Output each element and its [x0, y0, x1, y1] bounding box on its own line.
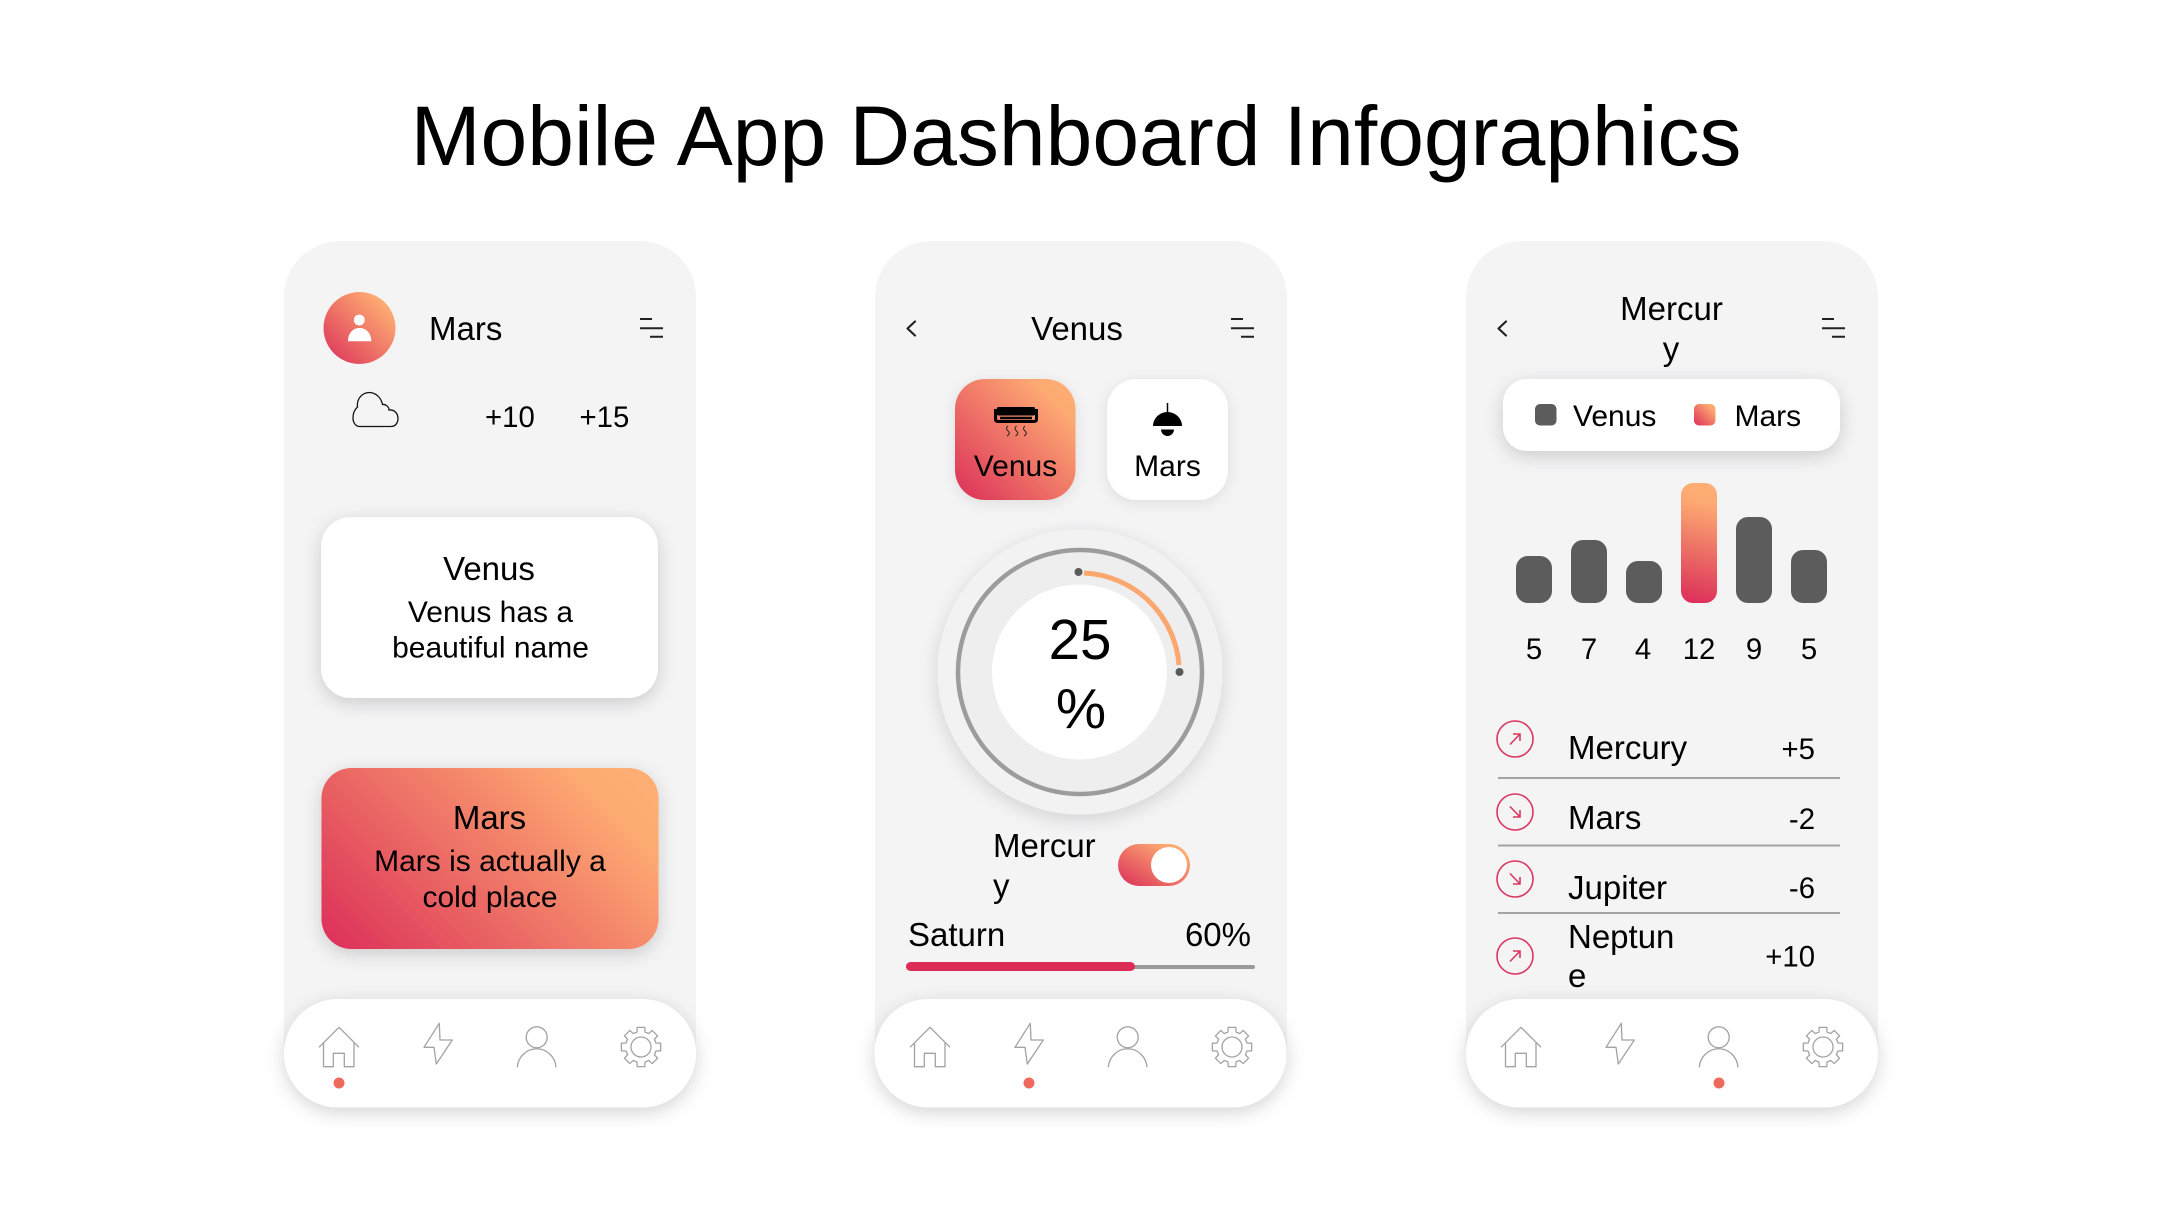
icon: menu — [1822, 319, 1845, 337]
icon: ceiling lamp — [1153, 403, 1182, 436]
screen heading: Mercur — [1620, 290, 1723, 327]
panel: Mercury statistics screen — [1466, 241, 1878, 1108]
list row: Neptune: +10 — [1765, 940, 1815, 974]
card: Mars — [322, 768, 658, 949]
icon: air conditioner — [996, 407, 1036, 436]
title: Mobile App Dashboard Infographics — [411, 89, 1741, 183]
icon: cloud — [353, 392, 398, 426]
temperature high: +15 — [580, 401, 629, 434]
progress bar — [906, 962, 1255, 971]
screen heading — [1620, 290, 1723, 367]
list row: Mars: Mars — [1568, 799, 1641, 836]
icon: settings — [1803, 1027, 1843, 1067]
icon: user — [1699, 1027, 1738, 1067]
bar chart: 5 — [1526, 633, 1542, 666]
gauge: % — [1056, 677, 1106, 740]
icon: lightning — [424, 1023, 452, 1064]
bar chart — [1516, 483, 1827, 666]
screen heading: y — [1663, 330, 1680, 367]
card: Venus: Venus — [443, 550, 535, 587]
user name: Mars — [429, 310, 502, 347]
legend: Mars — [1734, 400, 1801, 433]
icon: user — [1108, 1027, 1147, 1067]
list row: Jupiter — [1497, 861, 1840, 913]
legend: Venus — [1573, 400, 1656, 433]
tile: Venus: Venus — [974, 450, 1057, 483]
bar chart: 12 — [1683, 633, 1715, 666]
icon: lightning — [1606, 1023, 1634, 1064]
bottom navigation — [874, 999, 1286, 1108]
tile: Venus — [955, 379, 1076, 500]
bar chart: 9 — [1746, 633, 1762, 666]
bar chart: 7 — [1581, 633, 1597, 666]
tile: Mars: Mars — [1134, 450, 1201, 483]
active indicator — [1024, 1078, 1034, 1088]
list row: Mars — [1497, 794, 1840, 846]
list row: Jupiter: Jupiter — [1568, 869, 1667, 906]
list row: Neptune: e — [1568, 957, 1586, 994]
list row: Mars: -2 — [1789, 803, 1815, 836]
list row: Mercury: Mercury — [1568, 729, 1688, 766]
active indicator — [334, 1078, 344, 1088]
list row: Neptune: Neptun — [1568, 918, 1674, 955]
icon: back — [1498, 322, 1506, 336]
bottom navigation — [284, 999, 696, 1108]
tile: Mars — [1107, 379, 1228, 500]
icon: home — [910, 1027, 950, 1067]
progress value: 60% — [1185, 916, 1251, 953]
toggle label: Mercur — [993, 827, 1096, 864]
icon: home — [1501, 1027, 1541, 1067]
active indicator — [1714, 1078, 1724, 1088]
gauge — [938, 530, 1222, 814]
progress label: Saturn — [908, 916, 1005, 953]
toggle — [1118, 844, 1190, 886]
legend — [1503, 379, 1840, 451]
card: Mars: Mars — [453, 799, 526, 836]
list row: Mercury: +5 — [1782, 733, 1815, 766]
icon: settings — [1212, 1027, 1252, 1067]
panel: Mars home screen — [284, 241, 696, 1108]
icon: home — [319, 1027, 359, 1067]
bar chart: 5 — [1801, 633, 1817, 666]
card: Mars: cold place — [422, 881, 558, 914]
toggle label — [993, 827, 1096, 904]
list row: Mercury — [1497, 721, 1840, 778]
list row: Jupiter: -6 — [1789, 872, 1815, 905]
temperature low: +10 — [485, 401, 535, 434]
list row: Neptune — [1497, 918, 1815, 994]
card: Mars: Mars is actually a — [374, 845, 606, 878]
icon: back — [908, 322, 915, 336]
panel: Venus control screen — [874, 241, 1287, 1108]
gauge: 25 — [1049, 608, 1111, 671]
bottom navigation — [1466, 999, 1878, 1108]
icon: settings — [621, 1027, 661, 1067]
icon: menu — [640, 319, 663, 337]
screen heading: Venus — [1031, 310, 1123, 347]
card: Venus — [321, 517, 658, 698]
toggle label: y — [993, 867, 1010, 904]
icon: user — [517, 1027, 556, 1067]
card: Venus: beautiful name — [392, 632, 589, 664]
card: Venus: Venus has a — [408, 596, 573, 629]
icon: menu — [1231, 319, 1254, 337]
avatar — [324, 292, 396, 364]
icon: lightning — [1015, 1023, 1043, 1064]
bar chart: 4 — [1635, 633, 1651, 666]
